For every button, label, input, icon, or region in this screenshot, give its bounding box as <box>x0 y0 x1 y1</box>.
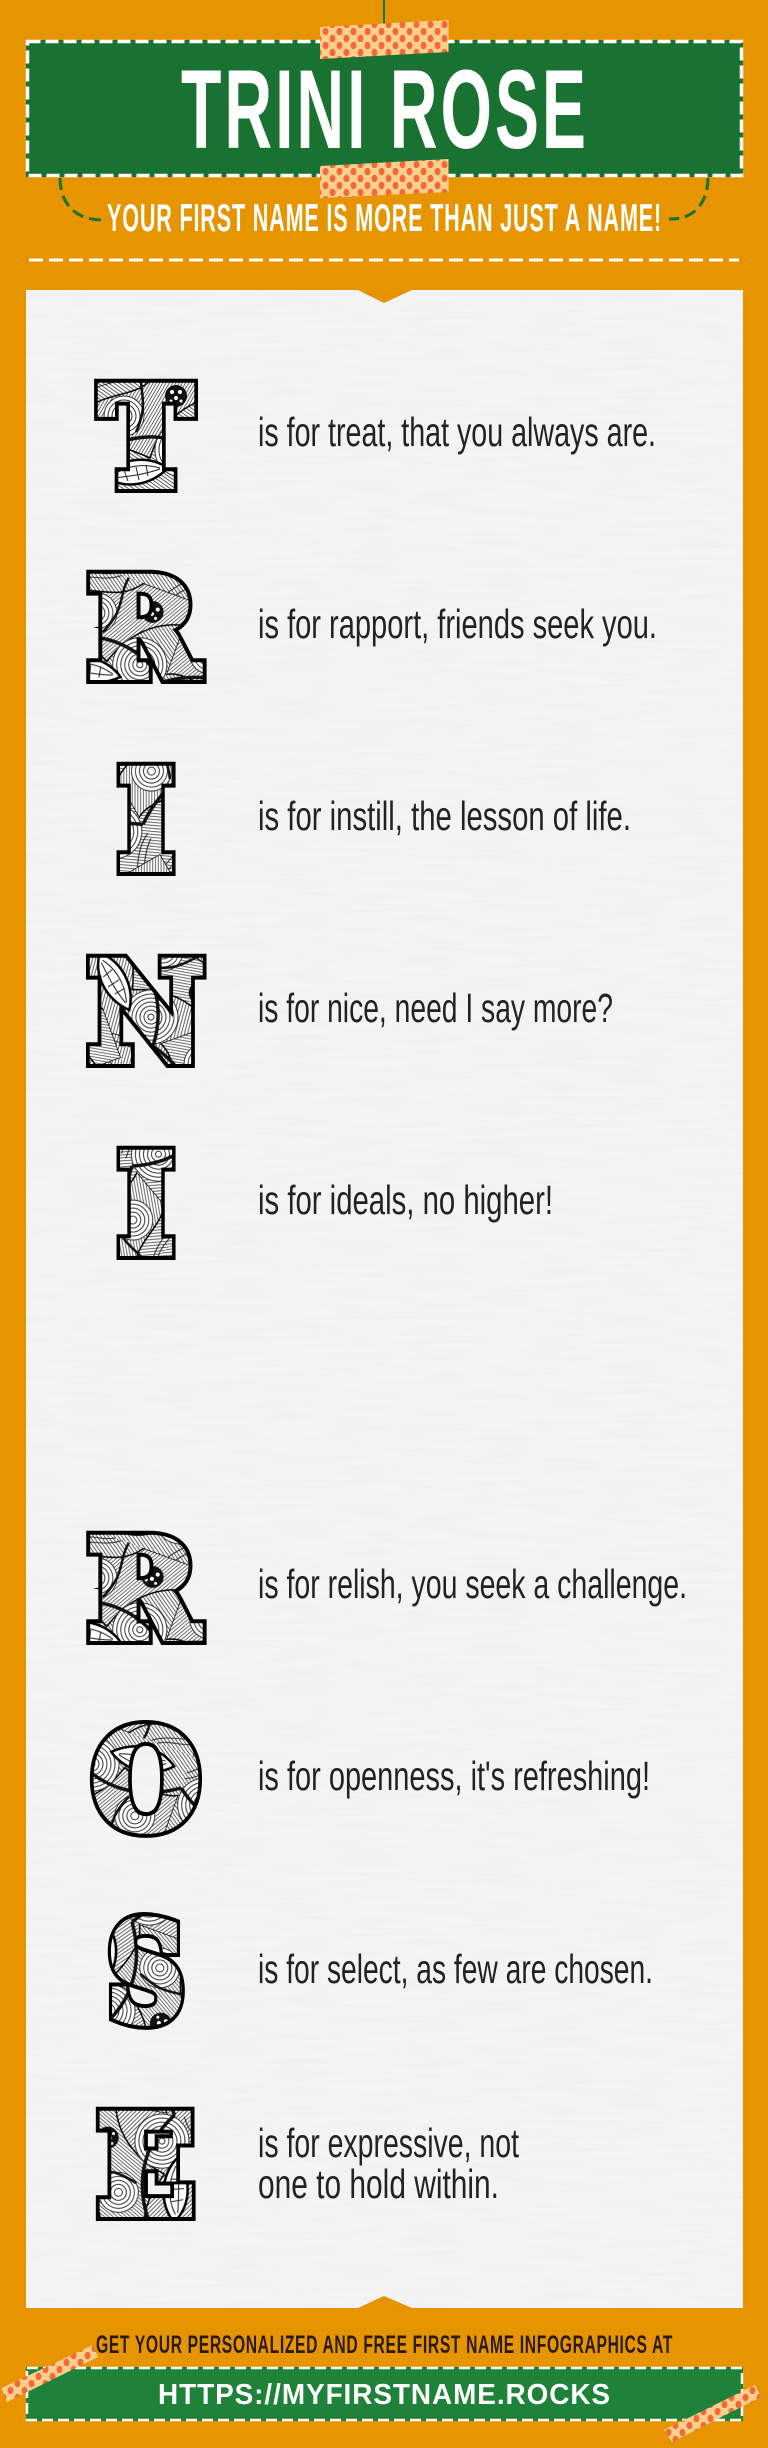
row: I second <box>119 1128 553 1283</box>
text I: is for instill, the lesson of life. <box>258 793 631 839</box>
text I second: is for ideals, no higher! <box>258 1177 553 1223</box>
letter E: E <box>98 2089 194 2244</box>
text E: is for expressive, not <box>258 2120 519 2166</box>
row: N <box>89 936 613 1091</box>
letter I: I <box>119 744 173 899</box>
letter R second: R <box>89 1513 198 1668</box>
row: R second <box>89 1513 687 1668</box>
letter O: O <box>93 1704 199 1859</box>
text E: one to hold within. <box>258 2161 499 2207</box>
letter N: N <box>89 936 203 1091</box>
letter I second: I <box>119 1128 173 1283</box>
text N: is for nice, need I say more? <box>258 985 613 1031</box>
panel: white letters panel <box>26 290 743 2308</box>
footer url: HTTPS://MYFIRSTNAME.ROCKS <box>158 2379 611 2411</box>
letter E: E <box>98 2089 194 2244</box>
letter S: S <box>108 1896 184 2051</box>
footer banner <box>26 2367 743 2421</box>
row: S <box>108 1896 653 2051</box>
text E <box>258 2120 519 2207</box>
letter N: N <box>89 936 203 1091</box>
letter T: T <box>101 361 191 516</box>
row: T <box>101 361 656 516</box>
row: E <box>98 2089 519 2244</box>
letter T: T <box>101 361 191 516</box>
letter I second: I <box>119 1128 173 1283</box>
tape: footer right <box>664 2385 761 2442</box>
row: I <box>119 744 631 899</box>
row: R <box>89 552 657 707</box>
tape: bottom <box>320 159 448 198</box>
letter I: I <box>119 744 173 899</box>
connector line above tape <box>383 0 385 24</box>
row: O <box>93 1704 650 1859</box>
curved dashed connector left <box>60 178 103 220</box>
letter R second: R <box>89 1513 198 1668</box>
letter R: R <box>89 552 198 707</box>
letter O: O <box>93 1704 199 1859</box>
tape: top <box>320 20 448 59</box>
letter S: S <box>108 1896 184 2051</box>
letter R: R <box>89 552 198 707</box>
tape: footer left <box>2 2345 98 2402</box>
curved dashed connector right <box>669 178 708 219</box>
title banner <box>26 40 743 177</box>
